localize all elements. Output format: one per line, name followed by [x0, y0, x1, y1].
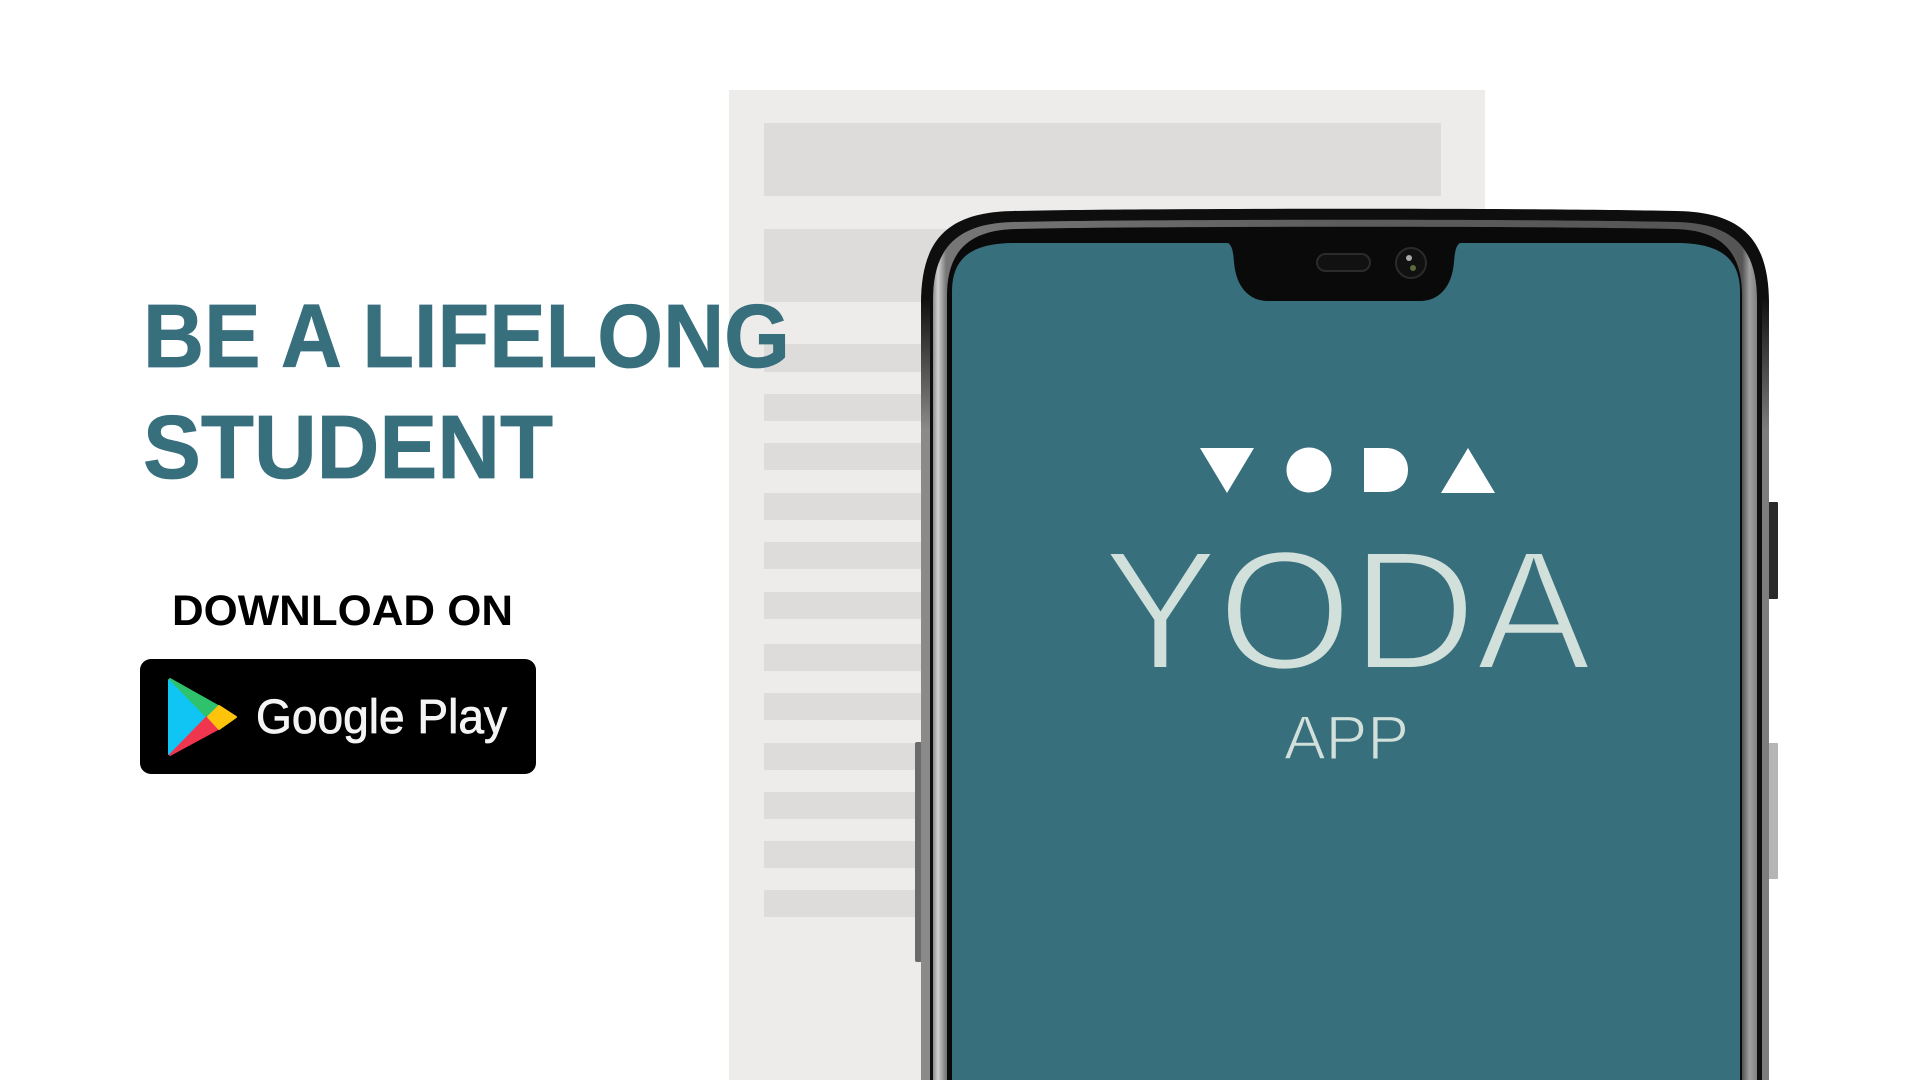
phone screen: [952, 243, 1740, 1080]
logo mark: shapes: [1200, 448, 1495, 493]
front camera: [1396, 248, 1426, 278]
headline: BE A LIFELONG: [143, 287, 790, 387]
headline: [143, 287, 790, 498]
icon: play triangle: [169, 679, 236, 755]
badge text: Google Play: [256, 691, 507, 744]
notch: [1224, 241, 1464, 301]
earpiece speaker: [1317, 254, 1370, 271]
headline: STUDENT: [143, 398, 553, 498]
phone body: [921, 209, 1769, 1080]
phone side buttons: [915, 502, 1778, 962]
phone: [915, 209, 1778, 1080]
download label: DOWNLOAD ON: [172, 587, 513, 635]
YODA wordmark: YODA: [1103, 516, 1592, 706]
Google Play badge: [140, 659, 536, 774]
APP label: APP: [1284, 704, 1409, 773]
background document panel: [729, 90, 1485, 1080]
